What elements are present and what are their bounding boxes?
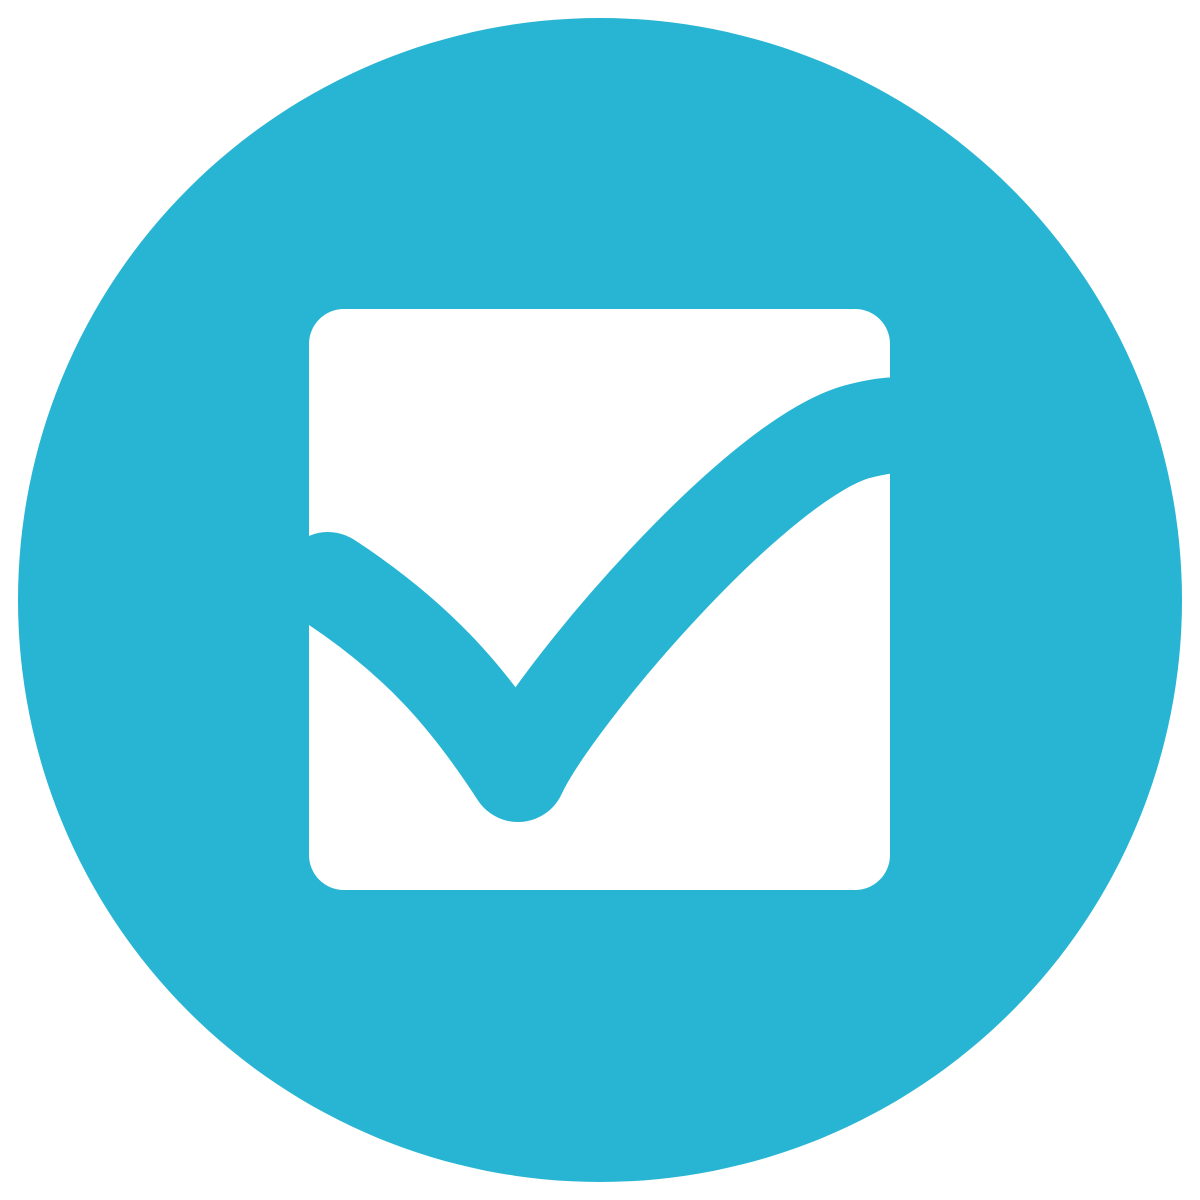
icon: check mark xyxy=(328,425,905,774)
icon: white rounded square xyxy=(309,309,890,890)
